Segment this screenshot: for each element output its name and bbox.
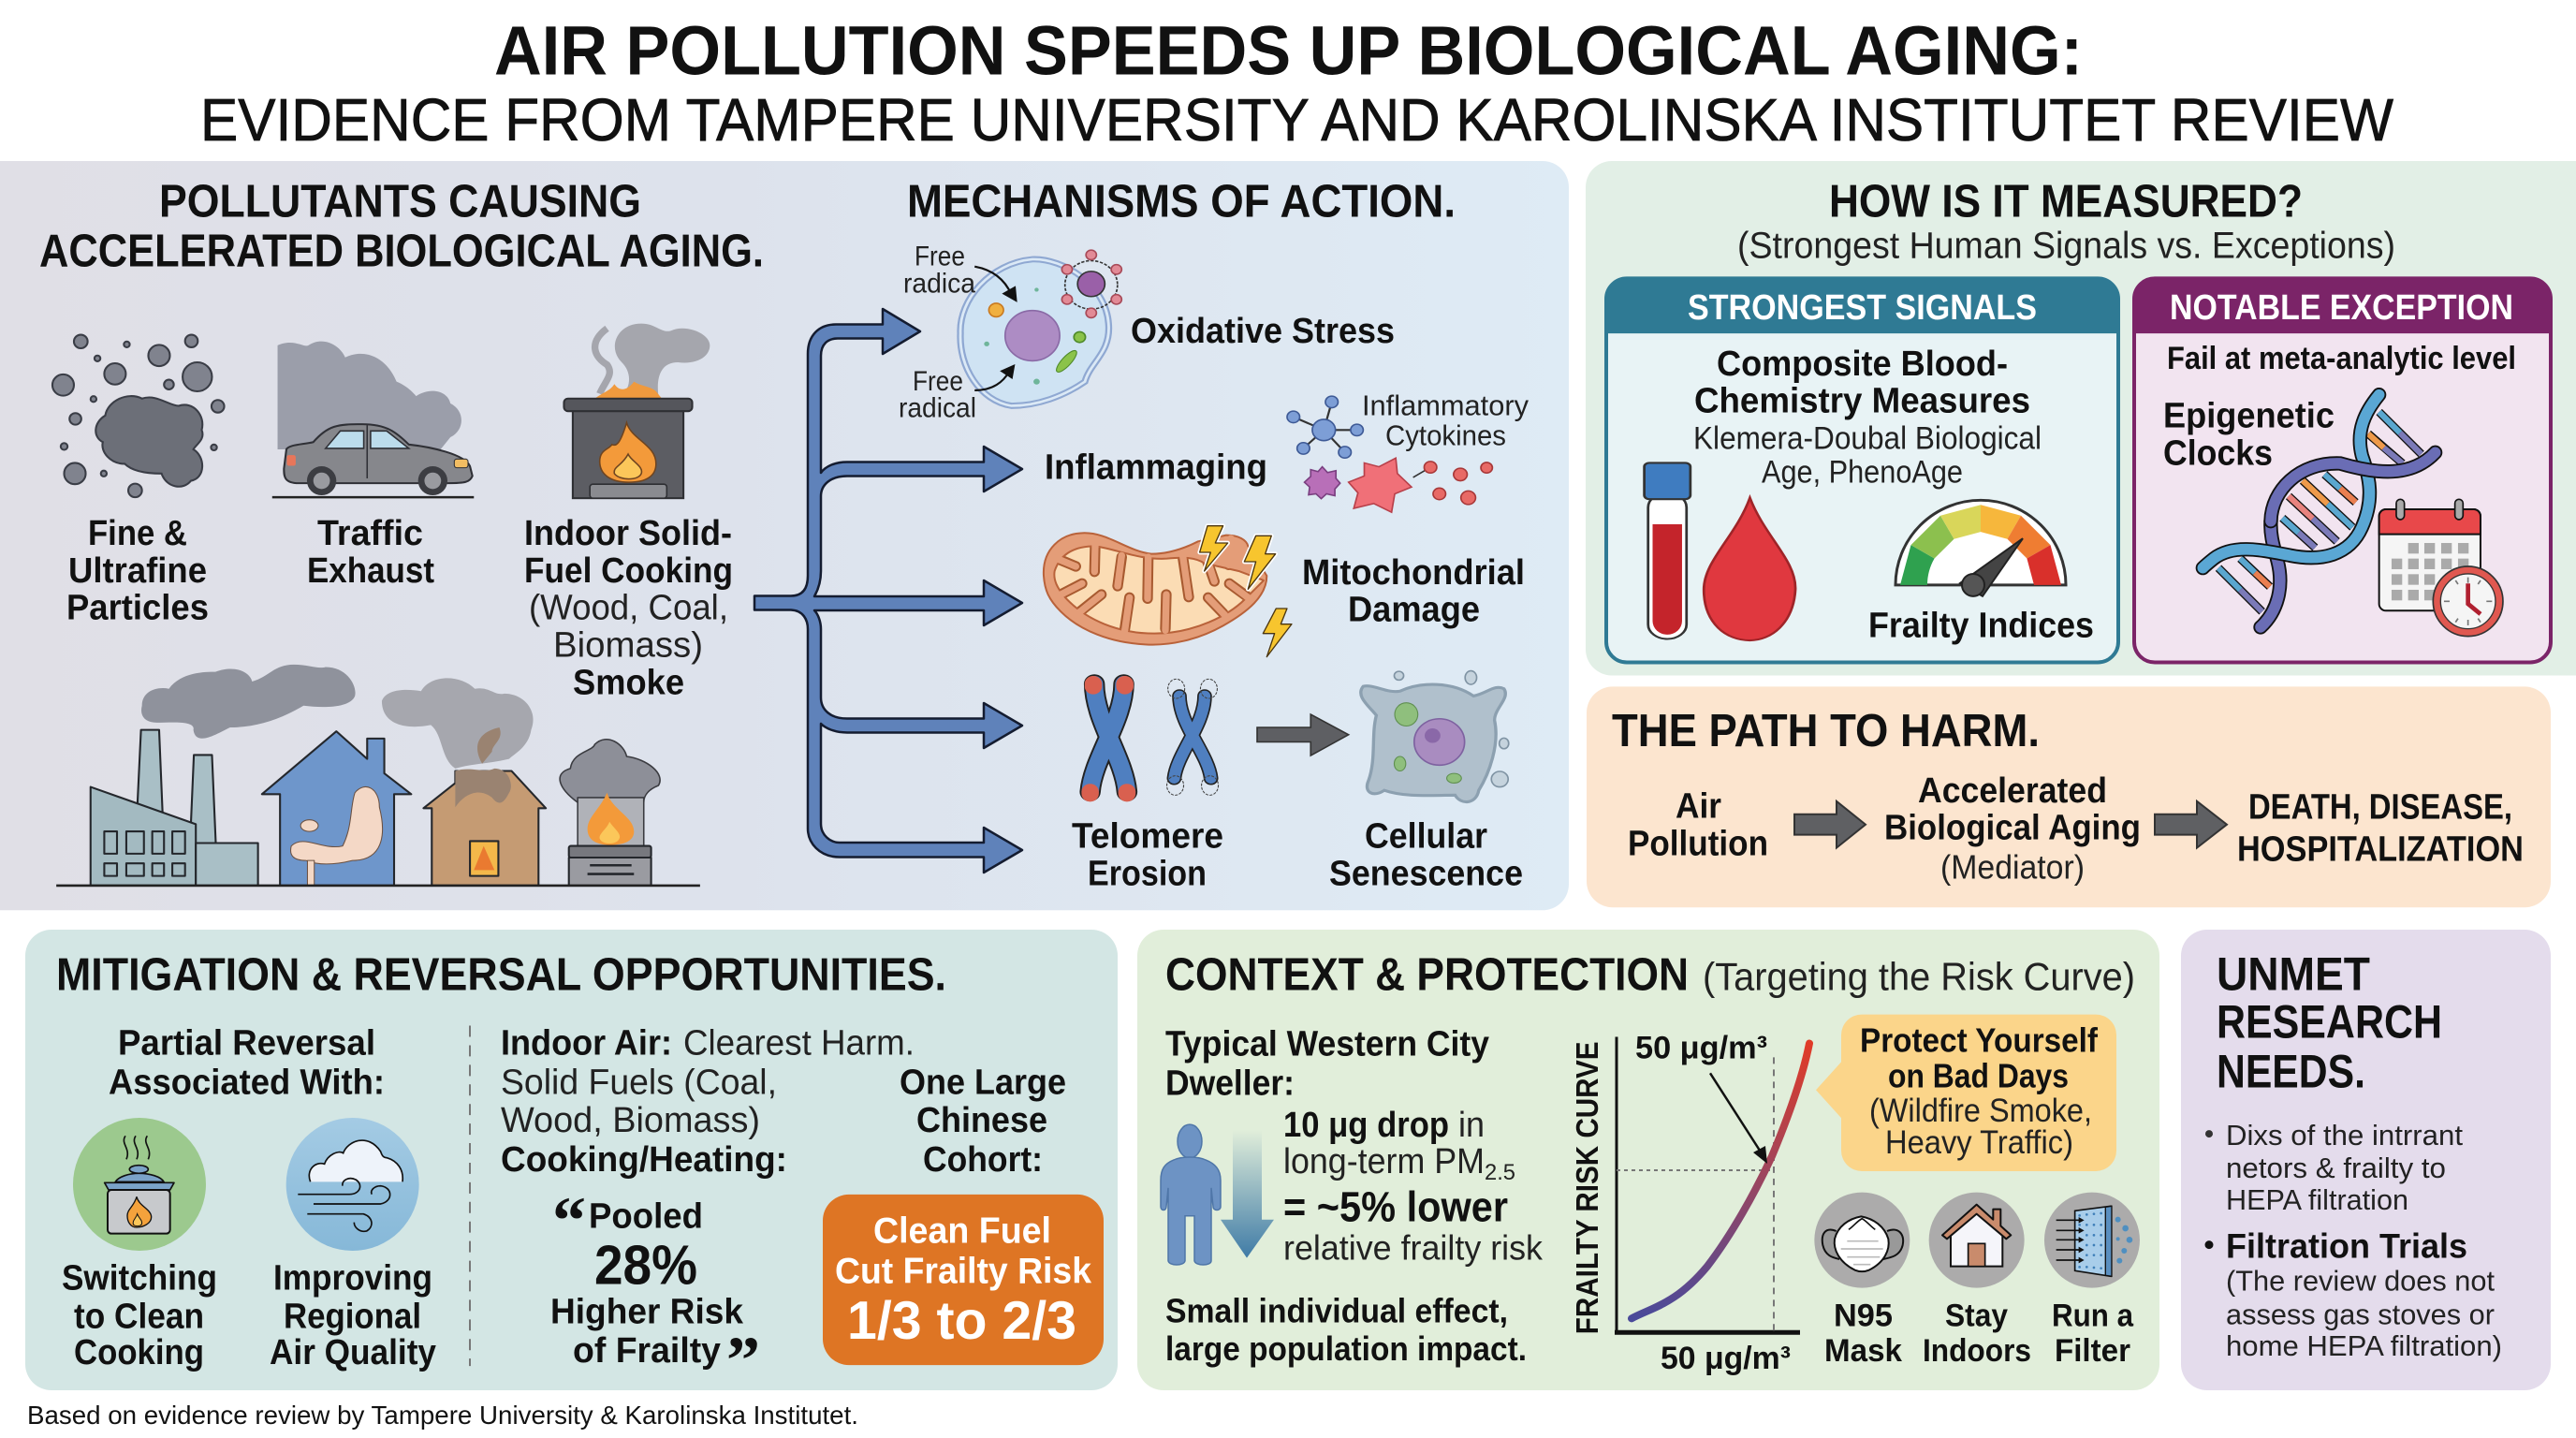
stat: pooled 28 percent: of Frailty bbox=[573, 1331, 721, 1371]
panel: notable exception bbox=[2134, 278, 2551, 663]
label: chinese cohort: Cohort: bbox=[923, 1140, 1043, 1180]
heading: pollutants: POLLUTANTS CAUSING bbox=[159, 177, 641, 227]
panel: strongest signals: Frailty Indices bbox=[1868, 607, 2094, 646]
text block: 10 microgram drop: 2.5 bbox=[1485, 1160, 1515, 1185]
panel: strongest signals: STRONGEST SIGNALS bbox=[1688, 288, 2037, 328]
label: mitochondrial damage: Mitochondrial bbox=[1302, 553, 1525, 593]
pollutant label: fine particles: Fine & bbox=[88, 514, 187, 553]
pollutant label: solid fuel: Fuel Cooking bbox=[524, 551, 733, 591]
callout: clean fuel: Clean Fuel bbox=[873, 1211, 1051, 1252]
stat: pooled 28 percent: 28% bbox=[594, 1234, 697, 1296]
flow step: accelerated aging: Accelerated bbox=[1918, 771, 2107, 811]
labels: protective actions bbox=[1824, 1298, 2134, 1369]
label: inflammatory cytokines: Cytokines bbox=[1385, 419, 1506, 452]
callout: protect yourself: on Bad Days bbox=[1888, 1056, 2069, 1094]
heading: context and protection: CONTEXT & PROTECTION bbox=[1165, 950, 1689, 1001]
stat: pooled 28 percent: Higher Risk bbox=[550, 1292, 744, 1331]
list: unmet needs bullets: home HEPA filtration) bbox=[2226, 1329, 2502, 1362]
heading: mitigation: MITIGATION & REVERSAL OPPORTUNITIES. bbox=[56, 950, 946, 1001]
panel: how is it measured background bbox=[1586, 161, 2576, 675]
arrow: telomere to senescence bbox=[1257, 714, 1349, 756]
stat: pooled 28 percent: ” bbox=[726, 1323, 760, 1398]
heading: pollutants: ACCELERATED BIOLOGICAL AGING. bbox=[39, 227, 764, 276]
label: western city dweller bbox=[1165, 1024, 1489, 1103]
stat: pooled 28 percent: “ bbox=[552, 1183, 586, 1258]
heading: unmet research needs: RESEARCH bbox=[2217, 996, 2442, 1048]
section: lower panels bbox=[25, 930, 2551, 1430]
flow step: accelerated aging: Biological Aging bbox=[1884, 809, 2141, 848]
callout labels: free radicals: radical bbox=[899, 393, 976, 424]
chart: frailty risk curve: 50 μg/m³ bbox=[1635, 1030, 1767, 1065]
icon: oxidative stress cell bbox=[960, 250, 1121, 405]
text block: indoor air: Solid Fuels (Coal, bbox=[501, 1063, 777, 1102]
label: improving regional air quality bbox=[270, 1259, 436, 1372]
callout: clean fuel: Cut Frailty Risk bbox=[835, 1252, 1091, 1291]
flow step: outcomes: DEATH, DISEASE, bbox=[2248, 788, 2512, 828]
text block: indoor air bbox=[501, 1023, 915, 1180]
callout: protect yourself: Protect Yourself bbox=[1860, 1021, 2099, 1059]
icon: blood tube and drop bbox=[1645, 462, 1795, 640]
panel: context background bbox=[1137, 930, 2159, 1390]
text block: population impact: large population impact. bbox=[1165, 1329, 1527, 1368]
chart: frailty risk curve bbox=[1570, 1030, 1809, 1376]
pollutant label: solid fuel bbox=[524, 514, 733, 702]
text block: 10 microgram drop: in bbox=[1458, 1106, 1485, 1145]
list: unmet needs bullets: (The review does not bbox=[2226, 1264, 2495, 1297]
heading: how is it measured: (Strongest Human Signals vs. Exceptions) bbox=[1737, 226, 2395, 266]
label: improving regional air quality: Regional bbox=[284, 1297, 421, 1336]
label: inflammaging: Inflammaging bbox=[1045, 448, 1267, 487]
panel: unmet needs background bbox=[2181, 930, 2551, 1390]
callout: clean fuel bbox=[823, 1195, 1104, 1365]
label: telomere erosion: Erosion bbox=[1088, 854, 1207, 893]
label: cellular senescence bbox=[1329, 817, 1523, 893]
pollutant label: traffic: Traffic bbox=[317, 514, 423, 553]
icon: traffic exhaust car bbox=[272, 342, 474, 497]
pollutant label: traffic: Exhaust bbox=[307, 551, 434, 591]
label: oxidative stress: Oxidative Stress bbox=[1131, 312, 1395, 351]
panel: notable exception: Clocks bbox=[2163, 434, 2273, 473]
label: cellular senescence: Senescence bbox=[1329, 854, 1523, 893]
pollutant label: solid fuel: Biomass) bbox=[553, 626, 703, 666]
section: upper panels bbox=[0, 161, 2576, 910]
callout: protect yourself: (Wildfire Smoke, bbox=[1869, 1093, 2092, 1129]
list: unmet needs bullets: Filtration Trials bbox=[2226, 1227, 2467, 1266]
text block: population impact bbox=[1165, 1291, 1527, 1368]
subheading: partial reversal bbox=[109, 1023, 385, 1102]
list: unmet needs bullets bbox=[2205, 1119, 2502, 1362]
list: unmet needs bullets: assess gas stoves or bbox=[2226, 1298, 2495, 1330]
heading: unmet research needs bbox=[2217, 948, 2442, 1097]
icon: clean cooking pot bbox=[73, 1118, 206, 1251]
icon: calendar and clock bbox=[2379, 499, 2503, 637]
icon: improving air quality bbox=[286, 1118, 419, 1251]
icon: N95 mask bbox=[1814, 1193, 1910, 1288]
icon: chromosomes with telomeres bbox=[1090, 679, 1219, 795]
callout: protect yourself bbox=[1816, 1015, 2116, 1171]
pollutant label: solid fuel: Smoke bbox=[573, 663, 684, 702]
pollutant label: fine particles bbox=[66, 514, 209, 628]
label: inflammatory cytokines: Inflammatory bbox=[1362, 389, 1530, 422]
panel: strongest signals: Klemera-Doubal Biological bbox=[1693, 421, 2042, 457]
icon: DNA helix bbox=[2203, 395, 2436, 627]
title: EVIDENCE FROM TAMPERE UNIVERSITY AND KAROLINSKA INSTITUTET REVIEW bbox=[200, 86, 2394, 154]
text block: 10 microgram drop bbox=[1283, 1106, 1544, 1268]
title: AIR POLLUTION SPEEDS UP BIOLOGICAL AGING: bbox=[494, 11, 2083, 90]
label: switching to clean cooking: Cooking bbox=[74, 1333, 204, 1372]
arrow: downward decrease bbox=[1221, 1130, 1274, 1258]
flow step: air pollution: Pollution bbox=[1628, 825, 1768, 864]
heading: how is it measured bbox=[1737, 177, 2395, 266]
callout labels: free radicals: Free bbox=[915, 242, 965, 271]
text block: indoor air: Cooking/Heating: bbox=[501, 1140, 787, 1180]
icon: stay indoors house bbox=[1929, 1193, 2025, 1288]
panel: mitigation background bbox=[25, 930, 1118, 1390]
text block: 10 microgram drop: 10 μg drop bbox=[1283, 1106, 1449, 1145]
text block: 10 microgram drop: = ~5% lower bbox=[1283, 1182, 1508, 1231]
flow step: outcomes: HOSPITALIZATION bbox=[2237, 830, 2524, 870]
pollutant label: fine particles: Particles bbox=[66, 589, 209, 628]
text block: population impact: Small individual effect, bbox=[1165, 1291, 1508, 1329]
label: switching to clean cooking bbox=[62, 1259, 217, 1372]
heading: context and protection: (Targeting the Risk Curve) bbox=[1703, 955, 2135, 999]
label: chinese cohort: One Large bbox=[900, 1063, 1066, 1102]
arrow: aging to harm bbox=[2155, 801, 2227, 848]
heading: how is it measured: HOW IS IT MEASURED? bbox=[1829, 177, 2303, 227]
label: telomere erosion bbox=[1072, 817, 1223, 893]
icon: person bbox=[1161, 1124, 1221, 1265]
callout: clean fuel: 1/3 to 2/3 bbox=[847, 1291, 1076, 1351]
callout labels: free radicals: Free bbox=[913, 366, 963, 397]
label: mitochondrial damage bbox=[1302, 553, 1525, 630]
icon: air filter bbox=[2044, 1193, 2140, 1288]
labels: protective actions: Filter bbox=[2055, 1333, 2130, 1369]
label: western city dweller: Typical Western City bbox=[1165, 1024, 1489, 1064]
pollutant label: solid fuel: (Wood, Coal, bbox=[529, 589, 728, 628]
text block: indoor air: Clearest Harm. bbox=[683, 1023, 915, 1063]
label: telomere erosion: Telomere bbox=[1072, 817, 1223, 857]
icon: mitochondrion bbox=[1044, 526, 1292, 657]
chart: frailty risk curve: FRAILTY RISK CURVE bbox=[1570, 1041, 1604, 1334]
illustration: pollution sources scene bbox=[56, 665, 700, 886]
panel: strongest signals: Chemistry Measures bbox=[1694, 382, 2030, 421]
list: unmet needs bullets: Dixs of the intrrant bbox=[2226, 1119, 2463, 1152]
text block: indoor air: Wood, Biomass) bbox=[501, 1101, 760, 1140]
icon: fine particles bbox=[52, 335, 225, 497]
panel: notable exception: NOTABLE EXCEPTION bbox=[2170, 288, 2513, 328]
labels: protective actions: Run a bbox=[2052, 1298, 2134, 1333]
label: western city dweller: Dweller: bbox=[1165, 1064, 1295, 1103]
arrows: mechanism branching tree bbox=[754, 309, 1022, 873]
heading: pollutants bbox=[39, 177, 764, 276]
flow step: accelerated aging bbox=[1884, 771, 2141, 886]
labels: protective actions: N95 bbox=[1834, 1298, 1893, 1333]
labels: protective actions: Indoors bbox=[1923, 1333, 2031, 1369]
label: improving regional air quality: Improving bbox=[273, 1259, 432, 1298]
label: improving regional air quality: Air Quality bbox=[270, 1333, 436, 1372]
callout labels: free radicals: radica bbox=[903, 268, 975, 299]
label: chinese cohort bbox=[900, 1063, 1066, 1180]
chart: frailty risk curve: 50 μg/m³ bbox=[1661, 1341, 1791, 1376]
callout: protect yourself: Heavy Traffic) bbox=[1885, 1124, 2073, 1161]
label: switching to clean cooking: to Clean bbox=[74, 1297, 204, 1336]
panel: path to harm background bbox=[1587, 686, 2551, 907]
text block: indoor air: Indoor Air: bbox=[501, 1023, 672, 1063]
text block: 10 microgram drop: long-term PM bbox=[1283, 1142, 1485, 1181]
footer source note: Based on evidence review by Tampere University & Karolinska Institutet. bbox=[27, 1401, 858, 1430]
panel: notable exception: Fail at meta-analytic level bbox=[2167, 341, 2516, 376]
heading: path to harm: THE PATH TO HARM. bbox=[1612, 706, 2040, 756]
icon: frailty gauge bbox=[1895, 500, 2066, 596]
heading: unmet research needs: NEEDS. bbox=[2217, 1045, 2365, 1097]
icon: cytokines bbox=[1287, 396, 1492, 512]
flow step: outcomes bbox=[2237, 788, 2524, 870]
subheading: partial reversal: Partial Reversal bbox=[118, 1023, 375, 1063]
stat: pooled 28 percent bbox=[550, 1183, 760, 1398]
heading: unmet research needs: UNMET bbox=[2217, 948, 2370, 1001]
panel: strongest signals bbox=[1606, 278, 2118, 663]
subheading: partial reversal: Associated With: bbox=[109, 1063, 385, 1102]
arrow: pollution to aging bbox=[1794, 801, 1866, 848]
label: chinese cohort: Chinese bbox=[916, 1101, 1047, 1140]
flow step: air pollution bbox=[1628, 787, 1768, 864]
labels: protective actions: Mask bbox=[1824, 1333, 1902, 1369]
icon: senescent cell bbox=[1361, 671, 1509, 802]
label: cellular senescence: Cellular bbox=[1365, 817, 1487, 857]
panel: strongest signals: Composite Blood- bbox=[1717, 345, 2008, 384]
list: unmet needs bullets: HEPA filtration bbox=[2226, 1183, 2408, 1216]
pollutant label: traffic bbox=[307, 514, 434, 591]
list: unmet needs bullets: netors & frailty to bbox=[2226, 1152, 2446, 1184]
icon: indoor stove bbox=[564, 324, 710, 498]
callout labels: free radicals bbox=[899, 242, 976, 424]
heading: context and protection bbox=[1165, 950, 2135, 1001]
label: inflammatory cytokines bbox=[1362, 389, 1530, 452]
label: mitochondrial damage: Damage bbox=[1348, 591, 1480, 630]
pollutant label: fine particles: Ultrafine bbox=[68, 551, 207, 591]
panel: notable exception: Epigenetic bbox=[2163, 397, 2334, 436]
panel: strongest signals: Age, PhenoAge bbox=[1762, 454, 1963, 490]
label: switching to clean cooking: Switching bbox=[62, 1259, 217, 1298]
panel: pollutants and mechanisms bbox=[0, 161, 1569, 910]
pollutant label: solid fuel: Indoor Solid- bbox=[524, 514, 732, 553]
title bbox=[200, 11, 2394, 154]
flow step: accelerated aging: (Mediator) bbox=[1940, 848, 2085, 886]
heading: mechanisms: MECHANISMS OF ACTION. bbox=[907, 177, 1456, 227]
flow step: air pollution: Air bbox=[1676, 787, 1721, 827]
labels: protective actions: Stay bbox=[1945, 1298, 2008, 1333]
text block: 10 microgram drop: relative frailty risk bbox=[1283, 1229, 1544, 1268]
stat: pooled 28 percent: Pooled bbox=[589, 1197, 703, 1237]
